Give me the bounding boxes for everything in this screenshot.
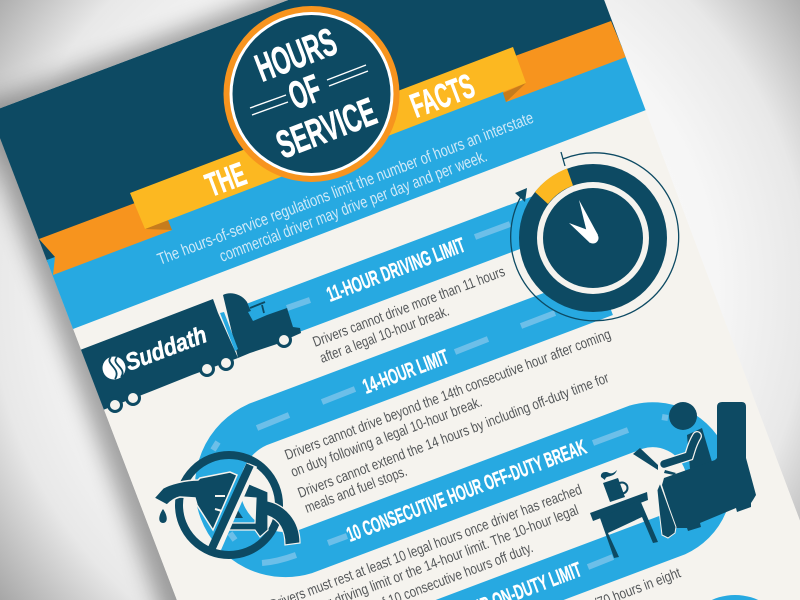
ribbon right tail <box>500 21 626 102</box>
title badge <box>224 6 400 182</box>
ribbon right fold <box>503 83 526 102</box>
intro blue band <box>46 40 646 329</box>
heading: 11-hour driving limit: 11-HOUR DRIVING LIMIT <box>324 234 469 307</box>
next road section <box>712 595 758 600</box>
ribbon left fold <box>145 220 172 230</box>
truck icon <box>80 293 301 412</box>
heading: 14-hour limit: 14-HOUR LIMIT <box>360 345 452 399</box>
header dark band <box>0 0 640 280</box>
text: 14-hour rules: Drivers cannot extend the 14 hours by including off-duty time for <box>296 370 611 502</box>
text: 14-hour rules: Drivers cannot drive beyond the 14th consecutive hour after coming <box>283 327 613 464</box>
clock icon <box>511 152 679 321</box>
title badge: SERVICE <box>271 90 382 167</box>
ribbon word THE: THE <box>200 155 251 204</box>
ribbon word FACTS: FACTS <box>405 67 480 125</box>
text: 11-hour rule: Drivers cannot drive more than 11 hours <box>311 264 507 351</box>
text: 11-hour rule: after a legal 10-hour break. <box>318 304 452 367</box>
text: 14-hour rules: meals and fuel stops. <box>303 464 410 517</box>
logo wordmark: Suddath <box>122 321 211 377</box>
title badge: HOURS <box>250 21 343 90</box>
road dashes <box>213 224 668 567</box>
ribbon left tail <box>39 203 172 275</box>
text: 11-hour rule <box>312 268 505 362</box>
ribbon main <box>130 47 526 229</box>
road <box>213 193 710 600</box>
intro text: The hours-of-service regulations limit the number of hours an interstate <box>155 109 536 269</box>
text: 14-hour rules <box>283 327 613 517</box>
fuel nozzle prohibited icon <box>154 455 300 555</box>
title badge: OF <box>283 67 327 118</box>
intro text: commercial driver may drive per day and per week. <box>217 147 490 266</box>
page shadow <box>0 0 400 600</box>
text: 14-hour rules: on duty following a legal 10-hour break. <box>289 394 484 481</box>
logo mark <box>102 356 126 380</box>
person reading in armchair icon <box>633 402 756 538</box>
side table with mug icon <box>590 470 658 558</box>
heading: 10 consecutive hour off-duty break: 10 CONSECUTIVE HOUR OFF-DUTY BREAK <box>344 436 590 547</box>
